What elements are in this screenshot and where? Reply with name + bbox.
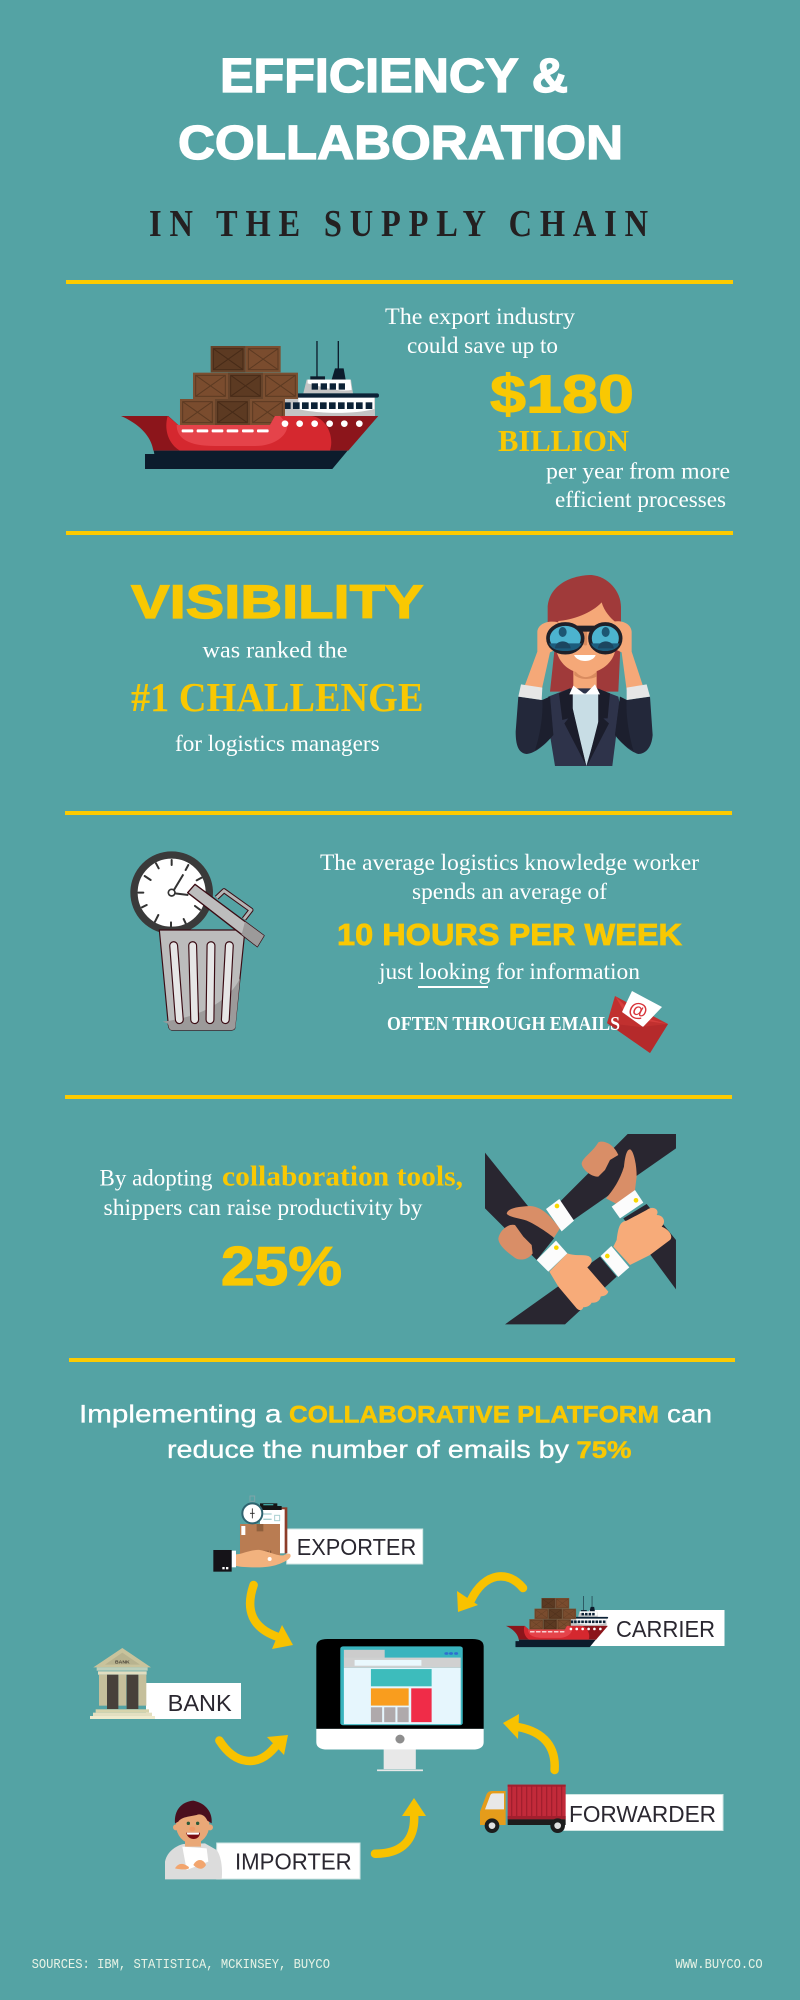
stat: 25%: 25% <box>221 1235 342 1297</box>
icon: computer monitor <box>316 1639 484 1771</box>
icon: truck <box>480 1785 566 1833</box>
icon: woman with binoculars <box>516 575 653 766</box>
stat: #1 challenge: #1 CHALLENGE <box>131 674 424 720</box>
title line 2: COLLABORATION <box>178 117 623 170</box>
text: website: WWW.BUYCO.CO <box>676 1957 763 1973</box>
icon: cargo ship <box>121 341 379 469</box>
text: efficient processes: efficient processes <box>555 487 726 512</box>
text: export industry: The export industry <box>385 304 576 329</box>
text: per year: per year from more <box>546 458 730 484</box>
label: exporter: EXPORTER <box>297 1534 416 1560</box>
text: collaboration tools: collaboration tools, <box>222 1160 463 1192</box>
icon: red envelope <box>607 991 668 1053</box>
text: often through emails: OFTEN THROUGH EMAILS <box>387 1013 620 1035</box>
node: bank <box>90 1648 241 1719</box>
stat: billion: BILLION <box>498 423 629 458</box>
text: shippers: shippers can raise productivity by <box>104 1195 423 1220</box>
footer <box>32 1957 763 1973</box>
icon: linked hands <box>485 1134 676 1324</box>
text: implementing: Implementing a <box>79 1400 282 1428</box>
stat: 10 hours: 10 HOURS PER WEEK <box>337 917 683 952</box>
diagram: platform network <box>90 1496 724 1879</box>
arrow: exporter to platform <box>250 1585 293 1649</box>
node: forwarder <box>480 1785 723 1833</box>
label: bank: BANK <box>168 1690 232 1716</box>
arrow: forwarder to platform <box>503 1714 555 1770</box>
text: looking for information: just looking for information <box>378 959 641 984</box>
icon: small ship <box>506 1596 608 1647</box>
label: carrier: CARRIER <box>616 1616 715 1642</box>
icon: hand with parcel <box>213 1496 291 1572</box>
text: was ranked: was ranked the <box>202 638 348 662</box>
heading: visibility: VISIBILITY <box>131 575 424 628</box>
text: average worker: The average logistics knowledge worker <box>320 850 699 875</box>
title line 1: EFFICIENCY & <box>220 50 568 103</box>
text: sources: SOURCES: IBM, STATISTICA, MCKINSEY, BUYCO <box>32 1957 330 1973</box>
icon: bank building: BANK <box>115 1659 130 1664</box>
arrow: importer to platform <box>375 1798 426 1854</box>
arrow: bank to platform <box>219 1735 288 1761</box>
stat: $180: $180 <box>490 364 634 424</box>
text: collaborative platform: COLLABORATIVE PLATFORM <box>289 1402 659 1428</box>
node: carrier <box>506 1596 724 1647</box>
stat: 75%: 75% <box>576 1437 632 1464</box>
panel: visibility <box>131 575 653 766</box>
text: spends an average: spends an average of <box>412 879 607 904</box>
title <box>149 50 648 245</box>
subtitle: IN THE SUPPLY CHAIN <box>149 203 648 245</box>
label: importer: IMPORTER <box>235 1848 352 1874</box>
icon: smiling man <box>165 1801 222 1879</box>
icon: clock in trash can <box>134 855 264 1030</box>
node: importer <box>165 1801 360 1879</box>
panel: export savings <box>121 304 730 512</box>
text: reduce emails: reduce the number of emails by <box>167 1436 570 1464</box>
arrow: carrier to platform <box>457 1576 523 1612</box>
icon: red envelope: @ <box>626 998 650 1023</box>
panel: collaboration tools <box>100 1134 676 1324</box>
panel: wasted hours <box>134 850 699 1053</box>
node: exporter <box>213 1496 423 1572</box>
text: could save: could save up to <box>407 333 558 358</box>
text: logistics managers: for logistics managers <box>175 731 380 756</box>
text: by adopting: By adopting <box>100 1166 213 1190</box>
icon: bank building <box>90 1648 155 1719</box>
text: can: can <box>667 1400 712 1428</box>
label: forwarder: FORWARDER <box>569 1801 716 1827</box>
panel: collaborative platform heading <box>79 1400 712 1464</box>
